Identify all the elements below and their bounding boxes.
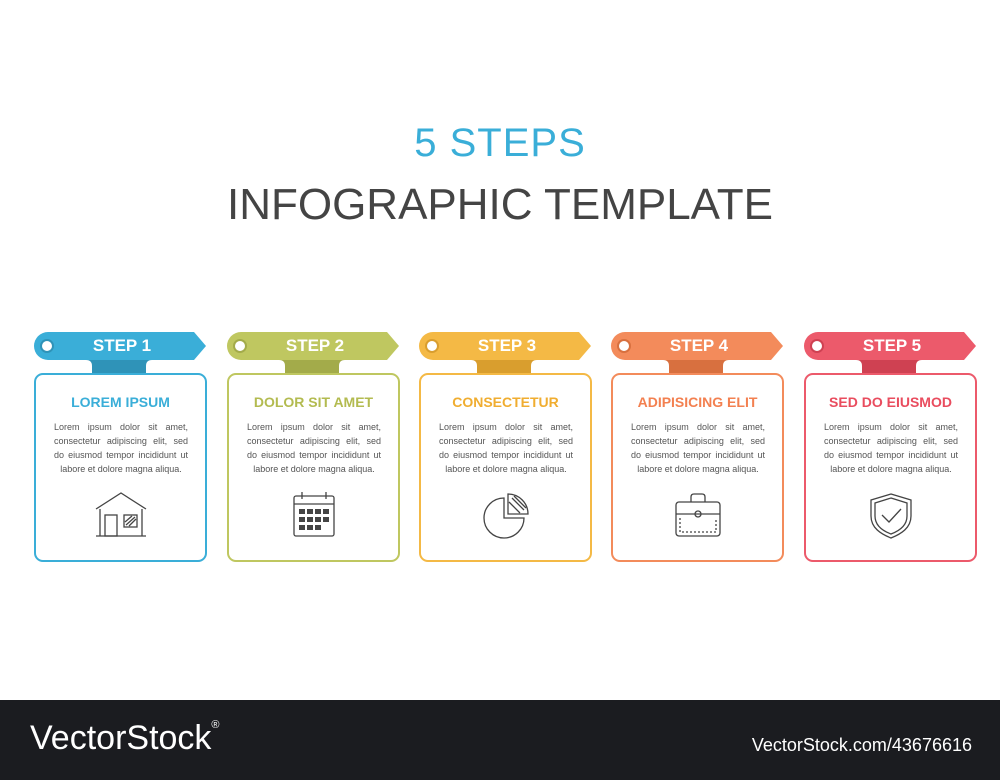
panel: step 2: STEP 2 <box>286 336 344 355</box>
icon: pie chart <box>483 493 529 539</box>
card: step 5: Lorem ipsum dolor sit amet, consectetur adipiscing elit, sed do eiusmod tempor incididunt ut labore et dolore magna aliqua. <box>824 422 958 474</box>
title: 5 STEPS <box>414 121 586 165</box>
card: step 3 <box>419 373 592 562</box>
card: step 3: Lorem ipsum dolor sit amet, consectetur adipiscing elit, sed do eiusmod tempor incididunt ut labore et dolore magna aliqua. <box>439 422 573 474</box>
panel: step 4 <box>611 332 784 562</box>
card: step 5: SED DO EIUSMOD <box>829 394 952 410</box>
icon: shield <box>870 493 912 539</box>
card: step 1: LOREM IPSUM <box>71 394 170 410</box>
icon: calendar <box>293 492 335 537</box>
footer url: VectorStock.com/43676616 <box>752 735 972 755</box>
panel: step 3 <box>419 332 592 562</box>
panel: step 3: STEP 3 <box>478 336 536 355</box>
card: step 4: Lorem ipsum dolor sit amet, consectetur adipiscing elit, sed do eiusmod tempor incididunt ut labore et dolore magna aliqua. <box>631 422 765 474</box>
card: step 1 <box>34 373 207 562</box>
tab: step 1 <box>34 332 206 373</box>
subtitle: INFOGRAPHIC TEMPLATE <box>227 180 773 229</box>
icon: house <box>96 492 146 537</box>
footer bar <box>0 700 1000 780</box>
card: step 1: Lorem ipsum dolor sit amet, consectetur adipiscing elit, sed do eiusmod tempor incididunt ut labore et dolore magna aliqua. <box>54 422 188 474</box>
card: step 4: ADIPISICING ELIT <box>638 394 757 410</box>
panel: step 5: STEP 5 <box>863 336 921 355</box>
panel: step 1: STEP 1 <box>93 336 151 355</box>
tab: step 4 <box>611 332 783 373</box>
card: step 2: Lorem ipsum dolor sit amet, consectetur adipiscing elit, sed do eiusmod tempor incididunt ut labore et dolore magna aliqua. <box>247 422 381 474</box>
tab: step 2 <box>227 332 399 373</box>
card: step 3: CONSECTETUR <box>452 394 559 410</box>
card: step 5 <box>804 373 977 562</box>
panel: step 4: STEP 4 <box>670 336 728 355</box>
tab: step 5 <box>804 332 976 373</box>
panel: step 5 <box>804 332 977 562</box>
card: step 2 <box>227 373 400 562</box>
card: step 2: DOLOR SIT AMET <box>254 394 373 410</box>
panel: step 1 <box>34 332 207 562</box>
panel: step 2 <box>227 332 400 562</box>
icon: briefcase <box>675 493 721 537</box>
card: step 4 <box>611 373 784 562</box>
footer logo: VectorStock® <box>30 719 220 757</box>
tab: step 3 <box>419 332 591 373</box>
